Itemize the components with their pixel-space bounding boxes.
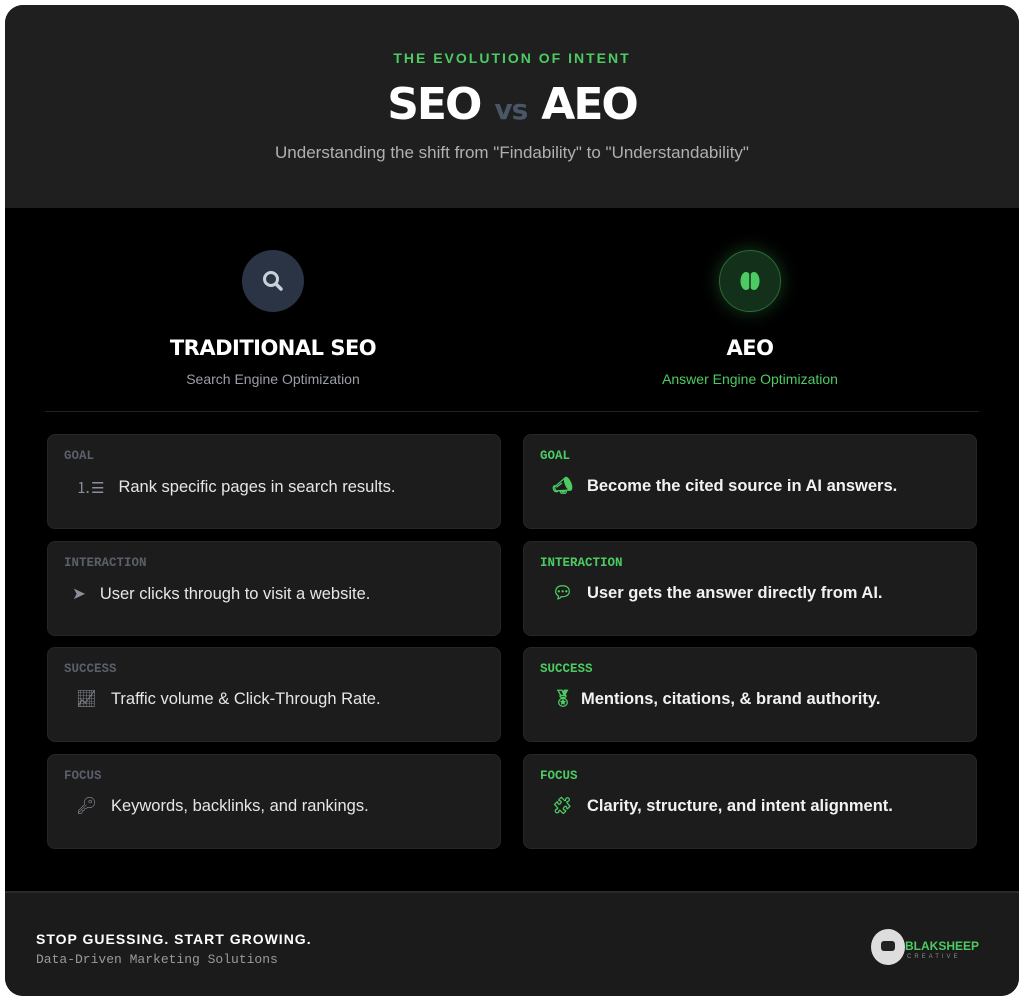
card: aeo success: Mentions, citations, & brand authority. <box>581 690 880 708</box>
footer <box>5 891 1019 996</box>
card: aeo interaction <box>523 541 977 636</box>
column header: traditional seo <box>170 250 376 387</box>
card: aeo interaction: INTERACTION <box>540 556 623 570</box>
card: seo goal: GOAL <box>64 449 94 463</box>
card: aeo success: SUCCESS <box>540 662 593 676</box>
card: seo success: SUCCESS <box>64 662 117 676</box>
column header: traditional seo: Search Engine Optimization <box>186 371 360 387</box>
title: SEO vs AEO <box>387 79 637 130</box>
icon: brain <box>719 250 781 312</box>
column header: aeo: AEO <box>727 336 773 360</box>
logo: CREATIVE <box>907 954 961 960</box>
column header: aeo <box>662 242 838 387</box>
card: aeo success: 🏅︎ <box>552 690 573 708</box>
card: seo interaction: ➤ <box>72 585 86 603</box>
card: aeo focus <box>523 754 977 849</box>
card: seo success: 📈︎ <box>76 690 97 708</box>
card: aeo goal: 📣︎ <box>552 477 573 495</box>
kicker: THE EVOLUTION OF INTENT <box>393 50 631 66</box>
card: seo focus <box>47 754 501 849</box>
logo: BLAKSHEEP <box>905 939 979 953</box>
card: aeo interaction: User gets the answer directly from AI. <box>587 584 883 602</box>
subtitle: Understanding the shift from "Findability" to "Understandability" <box>275 143 749 162</box>
column header: aeo: Answer Engine Optimization <box>662 371 838 387</box>
card: seo focus: FOCUS <box>64 769 102 783</box>
card: seo focus: 🔑︎ <box>76 797 97 815</box>
card: seo success: Traffic volume & Click-Through Rate. <box>111 690 381 708</box>
card: aeo goal <box>523 434 977 529</box>
card: seo interaction: INTERACTION <box>64 556 147 570</box>
header <box>5 5 1019 208</box>
logo <box>871 929 979 965</box>
card: seo focus: Keywords, backlinks, and rankings. <box>111 797 369 815</box>
card: seo goal <box>47 434 501 529</box>
card: aeo focus: FOCUS <box>540 769 578 783</box>
card: aeo goal: GOAL <box>540 449 570 463</box>
card: seo interaction: User clicks through to visit a website. <box>100 584 370 602</box>
card: seo goal: ⒈☰ <box>76 480 104 497</box>
card: seo goal: Rank specific pages in search results. <box>118 478 395 496</box>
icon: search <box>242 250 304 312</box>
card: aeo success <box>523 647 977 742</box>
footer subtext: Data-Driven Marketing Solutions <box>36 952 278 967</box>
tagline: STOP GUESSING. START GROWING. <box>36 931 312 947</box>
card: aeo focus: 🧩︎ <box>552 797 573 815</box>
card: aeo goal: Become the cited source in AI answers. <box>587 477 897 495</box>
column header: traditional seo: TRADITIONAL SEO <box>170 336 376 360</box>
card: aeo focus: Clarity, structure, and intent alignment. <box>587 797 893 815</box>
card: seo interaction <box>47 541 501 636</box>
card: seo success <box>47 647 501 742</box>
card: aeo interaction: 💬︎ <box>552 584 573 602</box>
